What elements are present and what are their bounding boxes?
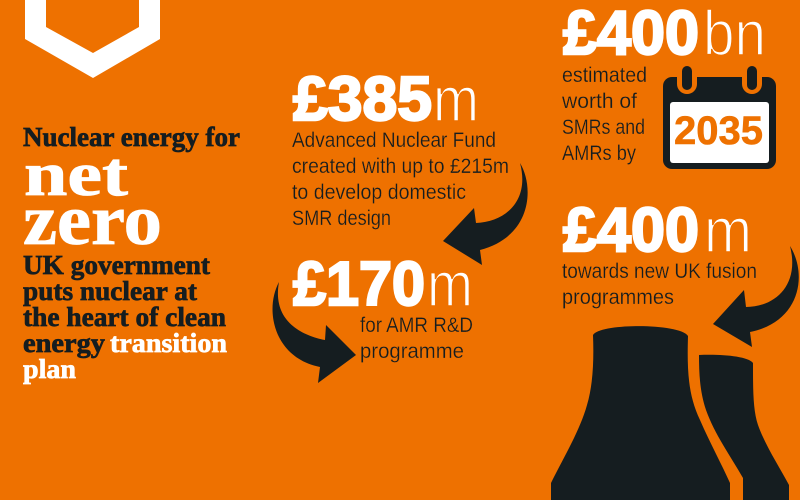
arrow: curving to cooling towers xyxy=(713,246,799,347)
stat: £385m advanced nuclear fund: SMR design xyxy=(292,207,391,230)
stat: £400bn SMR and AMR worth xyxy=(561,0,766,165)
stat: £400m fusion programmes: m xyxy=(704,196,752,266)
stat: £400bn SMR and AMR worth: estimated xyxy=(562,64,647,87)
stat: £400m fusion programmes: £400 xyxy=(563,196,699,265)
stat: £400m fusion programmes: towards new UK fusion xyxy=(562,260,757,283)
stat: £400bn SMR and AMR worth: bn xyxy=(703,0,766,69)
arrow: £385m to £170m xyxy=(443,163,528,265)
stat: £400m fusion programmes xyxy=(562,196,757,309)
subtitle text: energy xyxy=(23,328,106,358)
icon: calendar 2035 xyxy=(663,66,776,169)
subtitle text: plan xyxy=(23,354,76,384)
stat: £170m AMR programme: £170 xyxy=(293,250,425,319)
stat: £170m AMR programme: for AMR R&D xyxy=(360,314,473,337)
stat: £385m advanced nuclear fund: £385 xyxy=(293,65,432,134)
stat: £400bn SMR and AMR worth: £400 xyxy=(563,0,699,68)
stat: £170m AMR programme: m xyxy=(427,250,473,320)
stat: £170m AMR programme xyxy=(293,250,473,363)
stat: £385m advanced nuclear fund: m xyxy=(433,65,479,135)
stat: £400bn SMR and AMR worth: worth of xyxy=(561,90,637,113)
heading: nuclear energy for: Nuclear energy for xyxy=(23,122,240,152)
icon: calendar 2035: 2035 xyxy=(674,109,763,153)
subtitle text xyxy=(23,250,227,384)
icon: hexagon logo fragment xyxy=(25,0,160,78)
stat: £385m advanced nuclear fund: Advanced Nuclear Fund xyxy=(292,129,496,152)
subtitle text: the heart of clean xyxy=(23,302,226,332)
subtitle text: puts nuclear at xyxy=(23,276,197,306)
title block xyxy=(23,122,240,384)
stat: £170m AMR programme: programme xyxy=(360,340,464,363)
heading: zero: zero xyxy=(23,180,162,260)
arrow: curving to AMR programme xyxy=(273,282,356,383)
stat: £385m advanced nuclear fund xyxy=(292,65,509,230)
stat: £400bn SMR and AMR worth: AMRs by xyxy=(562,142,636,165)
stat: £385m advanced nuclear fund: created with up to £215m xyxy=(292,155,509,178)
stat: £385m advanced nuclear fund: to develop domestic xyxy=(292,181,466,204)
icon: cooling towers xyxy=(551,326,789,500)
stat: £400bn SMR and AMR worth: SMRs and xyxy=(562,116,645,139)
subtitle text: transition xyxy=(110,328,227,358)
subtitle text: UK government xyxy=(23,250,210,280)
stat: £400m fusion programmes: programmes xyxy=(562,286,674,309)
heading: net: net xyxy=(24,141,128,209)
